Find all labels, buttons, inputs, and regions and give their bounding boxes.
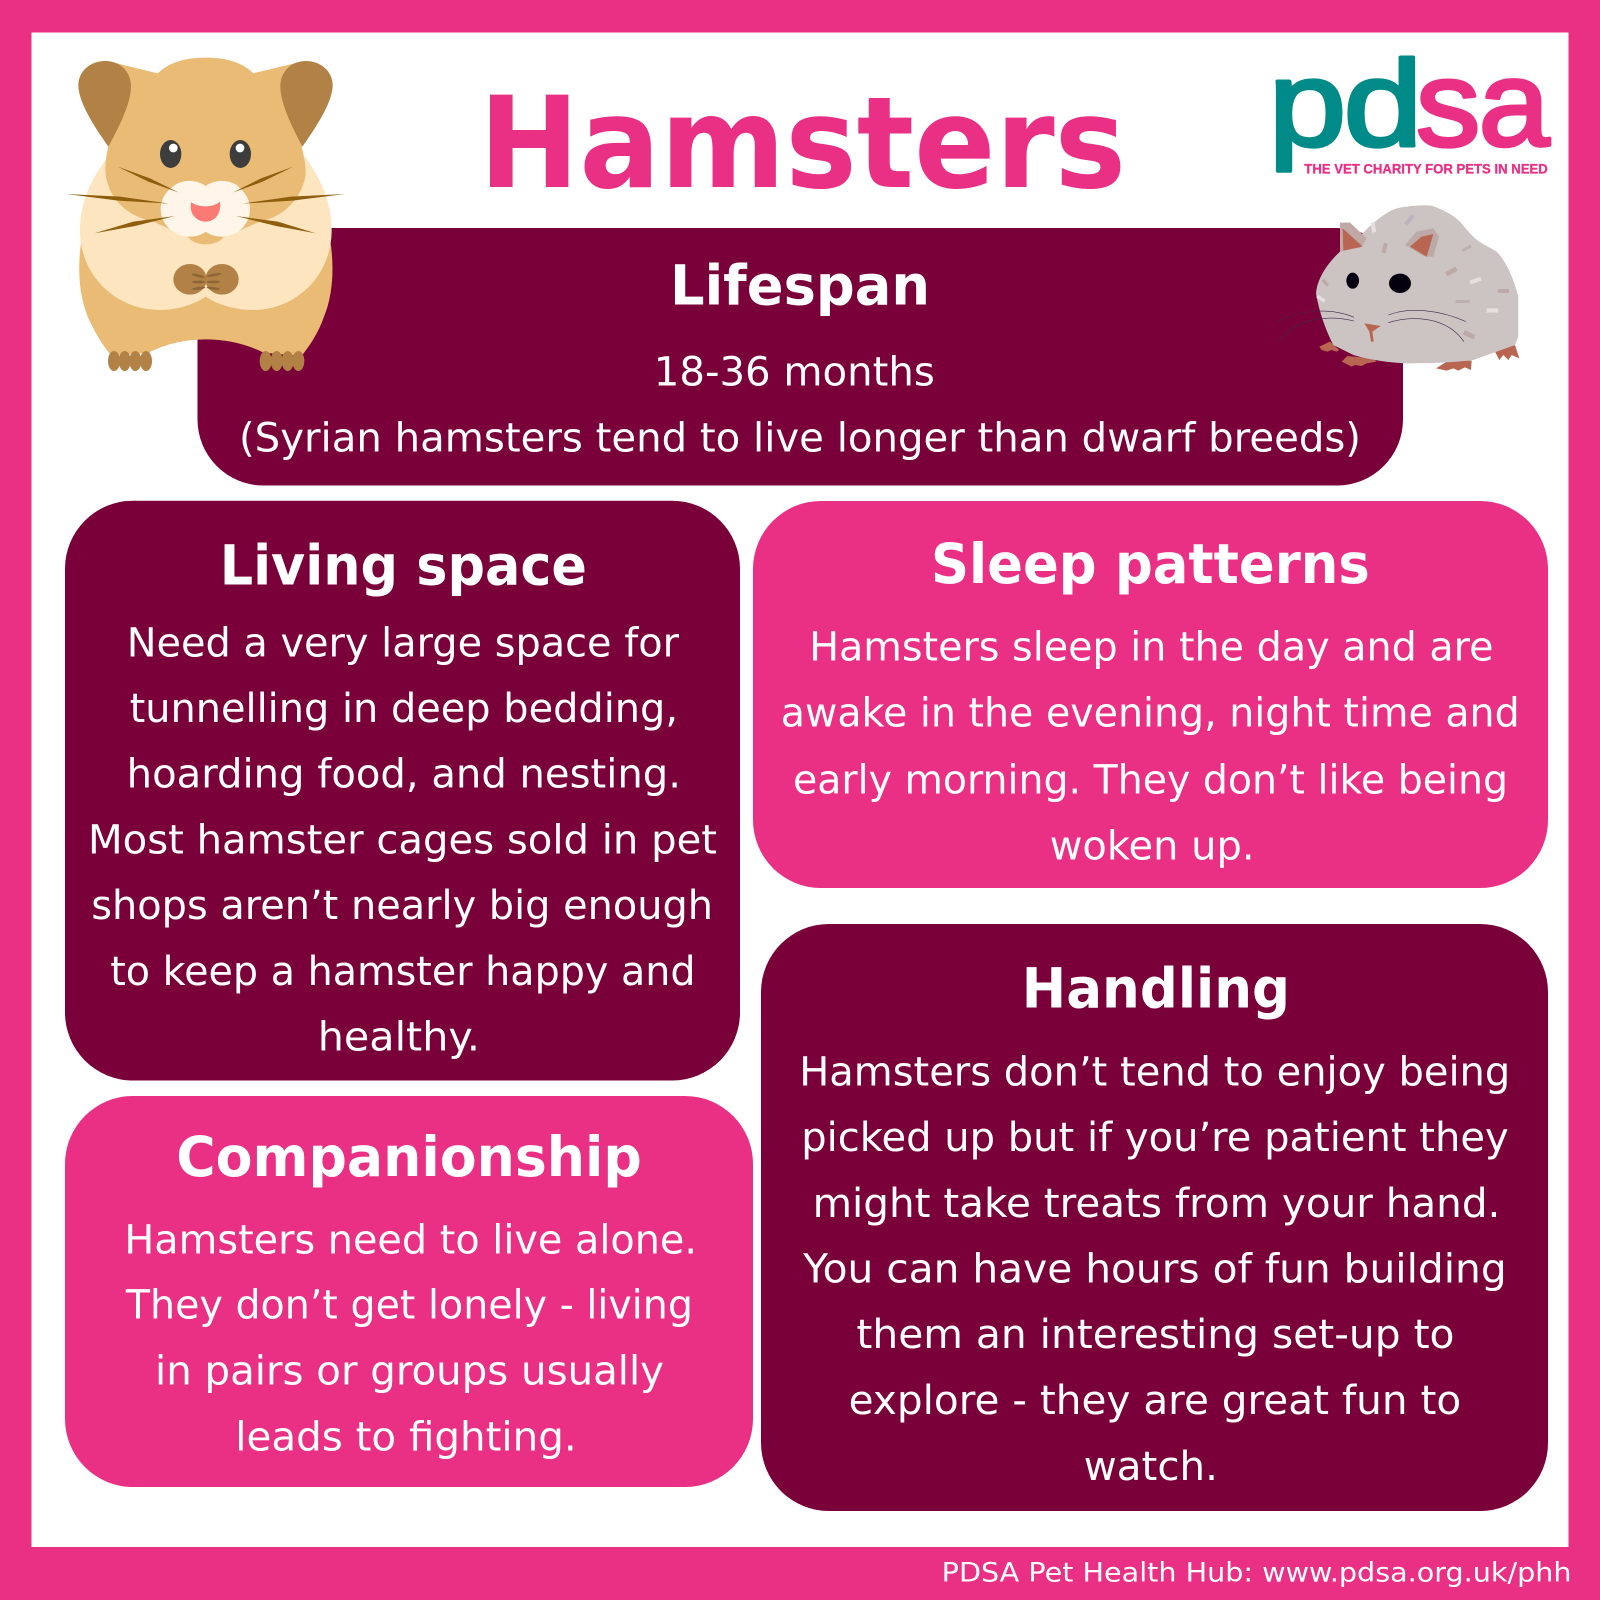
body: handling: picked up but if you’re patient they [801, 1115, 1509, 1161]
body: sleep patterns: Hamsters sleep in the day and are [809, 625, 1494, 671]
lifespan note: (Syrian hamsters tend to live longer than dwarf breeds) [239, 416, 1361, 462]
heading: companionship: Companionship [176, 1125, 642, 1189]
body: companionship: leads to fighting. [235, 1415, 577, 1461]
heading: living space: Living space [220, 534, 587, 598]
logo: pdsa: d [1344, 36, 1423, 172]
panel: sleep patterns [753, 501, 1548, 888]
icon: grey hamster [1277, 205, 1519, 371]
icon: golden hamster [66, 58, 345, 371]
logo: pdsa [1268, 36, 1550, 176]
panel: living space [65, 501, 740, 1080]
body: living space [88, 620, 717, 1061]
logo: pdsa: p [1268, 36, 1346, 172]
body: handling [799, 1049, 1510, 1490]
body: living space: Need a very large space for [127, 620, 680, 666]
lifespan duration: 18-36 months [654, 350, 935, 396]
heading: sleep patterns: Sleep patterns [931, 532, 1370, 596]
body: companionship: in pairs or groups usually [155, 1349, 664, 1395]
body: companionship [124, 1217, 697, 1461]
body: handling: them an interesting set-up to [856, 1312, 1454, 1358]
heading: lifespan: Lifespan [670, 254, 930, 318]
logo: pdsa: THE VET CHARITY FOR PETS IN NEED [1304, 161, 1548, 176]
body: handling: Hamsters don’t tend to enjoy being [799, 1049, 1510, 1095]
panel: lifespan [198, 228, 1403, 486]
body: sleep patterns: early morning. They don’t like being [793, 757, 1508, 803]
body: living space: shops aren’t nearly big enough [91, 883, 713, 929]
body: living space: to keep a hamster happy and [110, 949, 696, 995]
body: companionship: Hamsters need to live alone. [124, 1217, 697, 1263]
body: handling: You can have hours of fun building [802, 1246, 1507, 1292]
logo: pdsa: s [1416, 36, 1480, 172]
title: Hamsters [479, 69, 1126, 217]
body: sleep patterns: awake in the evening, night time and [781, 691, 1520, 737]
body: living space: Most hamster cages sold in pet [88, 818, 717, 864]
panel: companionship [65, 1096, 753, 1487]
logo: pdsa: a [1479, 36, 1550, 172]
body: handling: watch. [1084, 1444, 1218, 1490]
footer link: PDSA Pet Health Hub: www.pdsa.org.uk/phh [942, 1558, 1572, 1589]
body: handling: might take treats from your hand. [813, 1181, 1500, 1227]
heading: handling: Handling [1022, 956, 1290, 1020]
body: living space: tunnelling in deep bedding, [130, 686, 678, 732]
body: companionship: They don’t get lonely - living [125, 1283, 693, 1329]
body: living space: hoarding food, and nesting. [127, 752, 681, 798]
panel: handling [761, 924, 1548, 1511]
body: handling: explore - they are great fun to [849, 1378, 1461, 1424]
body: sleep patterns [781, 625, 1520, 869]
body: living space: healthy. [318, 1015, 480, 1061]
body: sleep patterns: woken up. [1050, 823, 1255, 869]
